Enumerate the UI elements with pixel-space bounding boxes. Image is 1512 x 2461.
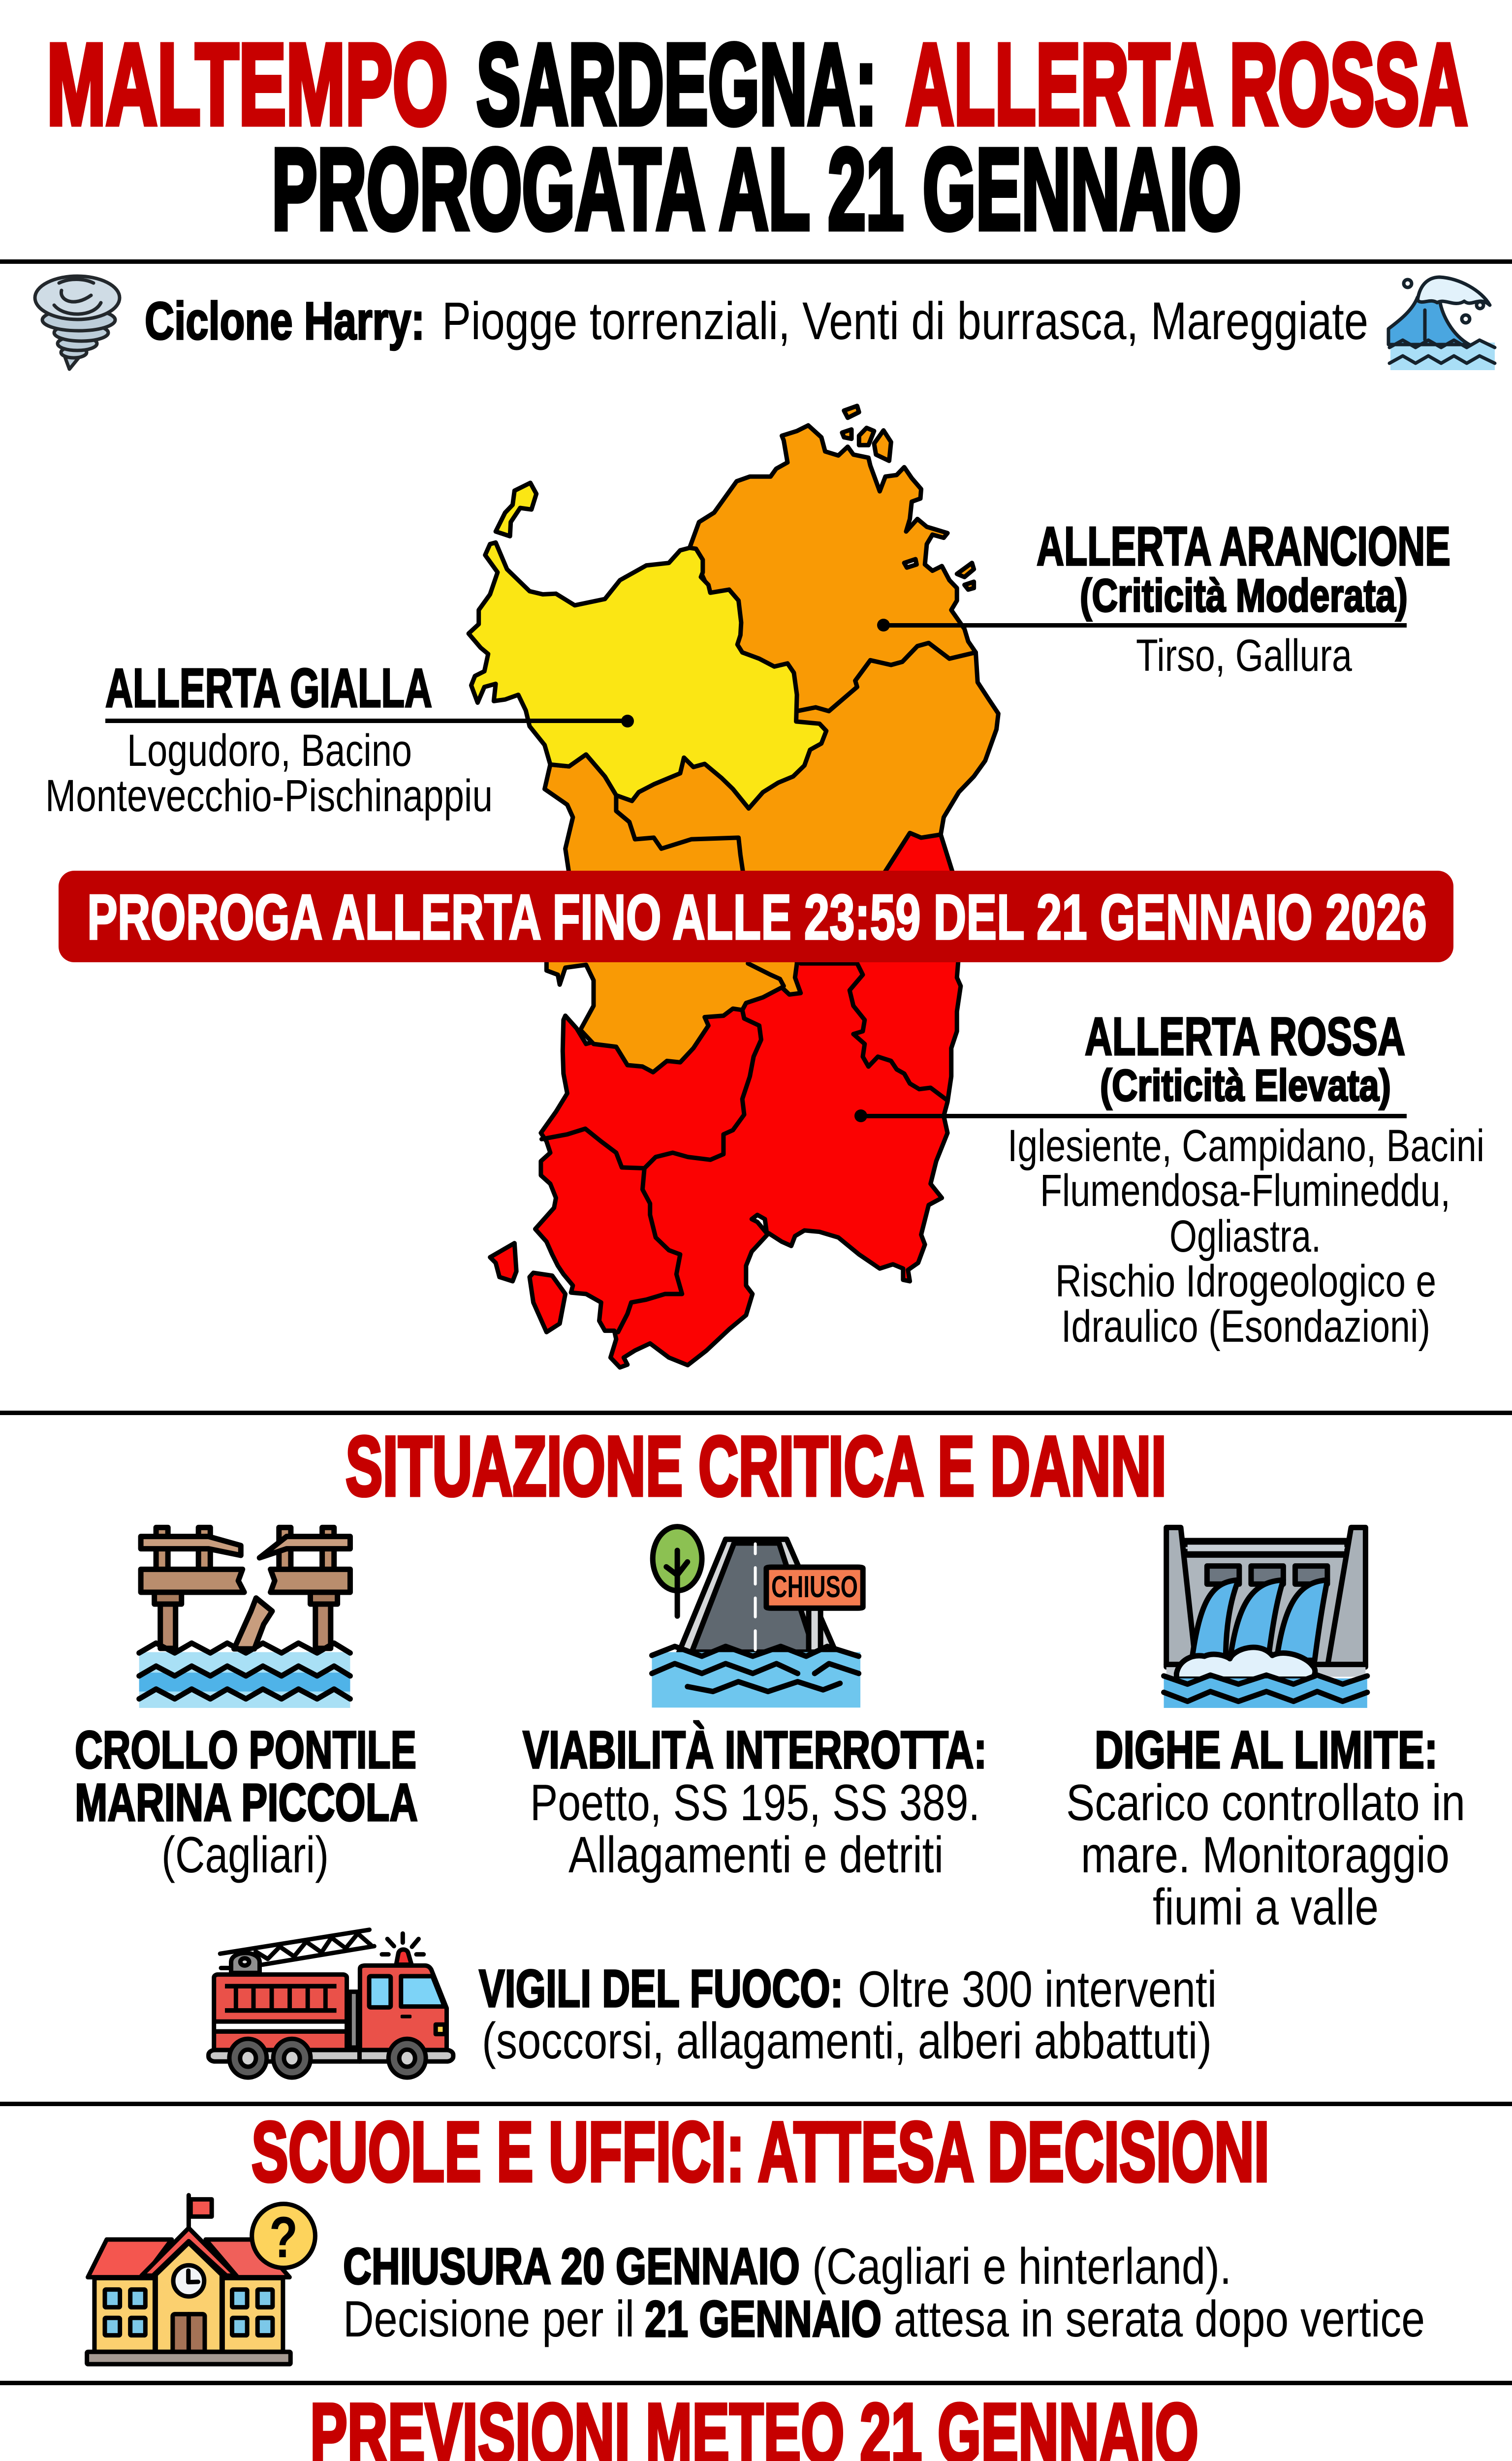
text: crollo pontile: MARINA PICCOLA	[75, 1772, 418, 1832]
text: vigili del fuoco: VIGILI DEL FUOCO:	[479, 1958, 843, 2018]
text: crollo pontile	[75, 1720, 418, 1884]
callout: allerta gialla: ALLERTA GIALLA	[105, 658, 432, 719]
title	[47, 20, 1468, 253]
callout: allerta gialla: Logudoro, Bacino	[127, 726, 412, 776]
text: viabilita interrotta: Poetto, SS 195, SS 389.	[530, 1774, 980, 1831]
title: MALTEMPO	[47, 20, 448, 149]
subtitle: ciclone Harry	[145, 291, 1368, 350]
text: crollo pontile: CROLLO PONTILE	[75, 1720, 416, 1779]
callout: allerta arancione: Tirso, Gallura	[1136, 631, 1353, 681]
subtitle: ciclone Harry: Ciclone Harry:	[145, 291, 425, 350]
text: vigili del fuoco	[479, 1958, 1217, 2070]
callout: allerta gialla	[45, 658, 634, 821]
icon: flooded road with closed sign: CHIUSO	[771, 1570, 858, 1604]
callout: allerta arancione: (Criticità Moderata)	[1080, 569, 1408, 621]
text: chiusura scuole	[343, 2238, 1425, 2348]
callout: allerta rossa: Rischio Idrogeologico e	[1055, 1256, 1436, 1306]
map south: red zones	[490, 907, 963, 1367]
text: dighe al limite: mare. Monitoraggio	[1081, 1827, 1449, 1884]
text: dighe al limite	[1066, 1720, 1465, 1936]
icon: school with question mark	[87, 2195, 315, 2364]
icon: dam	[1164, 1527, 1367, 1708]
text: viabilita interrotta: VIABILITÀ INTERROTTA:	[523, 1720, 987, 1779]
callout: allerta rossa	[854, 1007, 1484, 1352]
text: chiusura scuole: (Cagliari e hinterland).	[812, 2238, 1231, 2295]
icon: tornado	[35, 276, 120, 369]
text: chiusura scuole: CHIUSURA 20 GENNAIO	[343, 2238, 800, 2295]
callout: allerta arancione	[877, 516, 1450, 681]
icon: broken pier	[139, 1527, 350, 1708]
icon: wave	[1388, 277, 1495, 370]
icon: fire truck	[209, 1930, 453, 2078]
callout: allerta rossa: Ogliastra.	[1169, 1211, 1321, 1262]
text: chiusura scuole: 21 GENNAIO	[645, 2291, 882, 2348]
text: dighe al limite: fiumi a valle	[1153, 1879, 1379, 1936]
icon: flooded road with closed sign	[652, 1527, 863, 1707]
text: vigili del fuoco: Oltre 300 interventi	[858, 1961, 1217, 2018]
callout: allerta rossa: Idraulico (Esondazioni)	[1061, 1301, 1430, 1352]
text: vigili del fuoco: (soccorsi, allagamenti, alberi abbattuti)	[482, 2013, 1212, 2070]
text: crollo pontile: (Cagliari)	[161, 1827, 329, 1884]
map north: yellow and orange zones	[469, 406, 998, 886]
title: SARDEGNA:	[476, 20, 877, 149]
icon: school with question mark: ?	[269, 2205, 298, 2270]
text: viabilita interrotta: Allagamenti e detriti	[568, 1827, 944, 1884]
callout: allerta rossa: (Criticità Elevata)	[1100, 1061, 1391, 1110]
callout: allerta gialla: Montevecchio-Pischinappiu	[45, 771, 493, 821]
text: viabilita interrotta	[523, 1720, 987, 1884]
text: chiusura scuole: Decisione per il	[343, 2291, 634, 2348]
map: Sardegna	[469, 406, 998, 1367]
